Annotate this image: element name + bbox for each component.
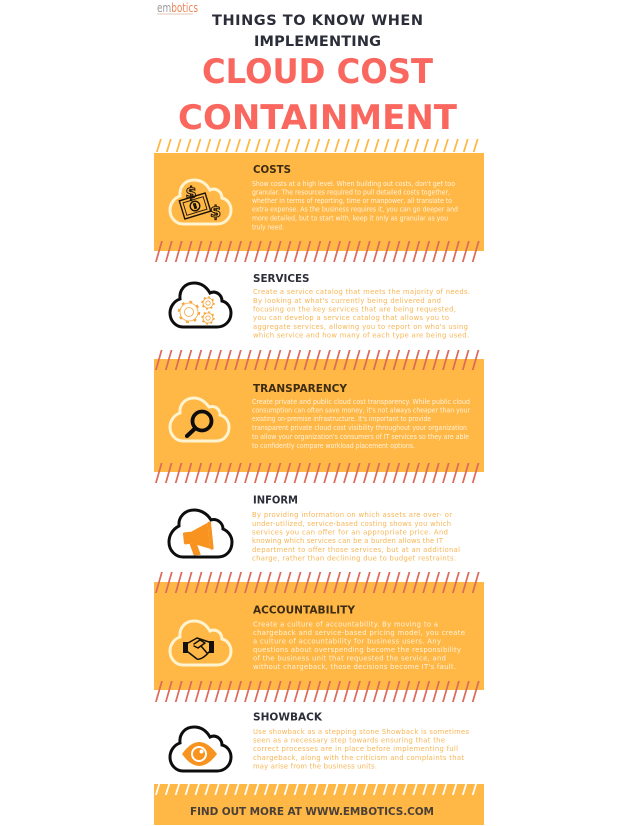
text: services body	[253, 288, 470, 340]
text: inform body: knowing which services can be a burden allows the IT	[252, 537, 444, 545]
heading: accountability: ACCOUNTABILITY	[253, 604, 355, 617]
text: accountability body: questions about overspending become the responsibility	[253, 646, 461, 654]
stripes: costs bottom	[158, 241, 483, 262]
icon: handshake cloud	[170, 621, 231, 665]
panel: accountability	[154, 582, 484, 692]
text: transparency body: consumption can often save money, it's not always cheaper than your	[252, 406, 470, 414]
panel: transparency	[154, 359, 484, 473]
text: services body: By looking at what's currently being delivered and	[253, 297, 441, 305]
icon: gears cloud	[170, 283, 231, 327]
text: transparency body: Create private and public cloud cost transparency. While public cloud	[252, 398, 470, 406]
text: inform body: under-utilized, service-based costing shows you which	[252, 520, 451, 528]
icon: money cloud: $	[210, 202, 221, 221]
text: inform body: charge, rather than declining due to budget restraints.	[252, 554, 456, 562]
text: transparency body: existing on-premise infrastructure. It's important to provide	[252, 415, 431, 423]
text: accountability body	[253, 620, 465, 671]
text: transparency body	[252, 398, 470, 450]
text: accountability body: chargeback and service-based pricing model, you create	[253, 629, 465, 637]
icon: money cloud	[170, 180, 231, 224]
title: IMPLEMENTING	[254, 34, 381, 50]
text: transparency body: to allow your organization's consumers of IT services so they are able	[252, 433, 469, 441]
title	[178, 13, 458, 138]
footer banner	[154, 784, 484, 825]
text: inform body: services you can offer for an appropriate price. And	[252, 528, 448, 536]
icon: eye cloud	[170, 727, 231, 771]
text: services body: Create a service catalog that meets the majority of needs.	[253, 288, 470, 296]
text: services body: aggregate services, allowing you to report on who's using	[253, 323, 468, 331]
stripes: accountability top	[158, 572, 483, 593]
title: CONTAINMENT	[178, 98, 458, 138]
text: showback body: correct processes are in place before implementing full	[253, 745, 458, 753]
text: inform body: By providing information on which assets are over- or	[252, 511, 452, 519]
text: inform body	[252, 511, 460, 562]
text: accountability body: without chargeback, those decisions become IT's fault.	[253, 663, 456, 671]
text: accountability body: a culture of accountability for business users. Any	[253, 638, 441, 646]
icon: megaphone cloud	[169, 510, 232, 557]
heading: costs: COSTS	[253, 163, 291, 176]
heading: inform: INFORM	[253, 494, 298, 507]
section: services	[170, 272, 470, 340]
logo: embotics: embotics	[157, 1, 198, 15]
text: inform body: department to offer those services, but at an additional	[252, 546, 460, 554]
stripes: transparency bottom	[158, 463, 483, 483]
icon: money cloud: $	[186, 183, 197, 202]
text: services body: focusing on the key services that are being requested,	[253, 306, 456, 314]
text: showback body	[253, 728, 469, 770]
section: showback	[170, 711, 469, 771]
stripes: transparency top	[158, 350, 483, 370]
text: costs body: whether in terms of reporting, time or manpower, all translate to	[252, 197, 452, 205]
heading: services: SERVICES	[253, 272, 310, 285]
text: accountability body: Create a culture of accountability. By moving to a	[253, 620, 438, 628]
text: transparency body: transparent private cloud cost visibility throughout your organization	[252, 424, 467, 432]
text: showback body: chargeback, along with the criticism and complaints that	[253, 754, 464, 762]
footer text: FIND OUT MORE AT WWW.EMBOTICS.COM	[190, 806, 434, 818]
text: transparency body: to confidently compare workload placement options.	[252, 442, 415, 450]
text: costs body: extra expense. As the business requires it, you can go deeper and	[252, 206, 458, 214]
text: showback body: seen as a necessary step towards ensuring that the	[253, 736, 445, 744]
text: services body: which service and how many of each type are being used.	[253, 332, 469, 340]
text: services body: you can develop a service catalog that allows you to	[253, 314, 449, 322]
heading: showback: SHOWBACK	[253, 711, 323, 724]
icon: magnifier cloud	[170, 398, 229, 441]
top stripes	[158, 139, 482, 152]
text: accountability body: of the business unit that requested the service, and	[253, 654, 446, 662]
title: THINGS TO KNOW WHEN	[212, 13, 423, 29]
text: showback body: Use showback as a stepping stone Showback is sometimes	[253, 728, 469, 736]
text: costs body: truly need.	[252, 223, 284, 231]
stripes: accountability bottom	[158, 681, 483, 702]
panel: costs	[154, 153, 484, 252]
stripes: footer	[157, 784, 483, 795]
section: inform	[169, 494, 460, 562]
text: showback body: may arise from the business units.	[253, 762, 377, 770]
text: costs body: granular. The resources required to pull detailed costs together,	[252, 188, 450, 196]
heading: transparency: TRANSPARENCY	[253, 382, 347, 395]
text: costs body	[252, 180, 458, 231]
title: CLOUD COST	[202, 52, 434, 92]
text: costs body: Show costs at a high level. When building out costs, don't get too	[252, 180, 455, 188]
text: costs body: more detailed, but to start with, keep it only as granular as you	[252, 214, 448, 222]
